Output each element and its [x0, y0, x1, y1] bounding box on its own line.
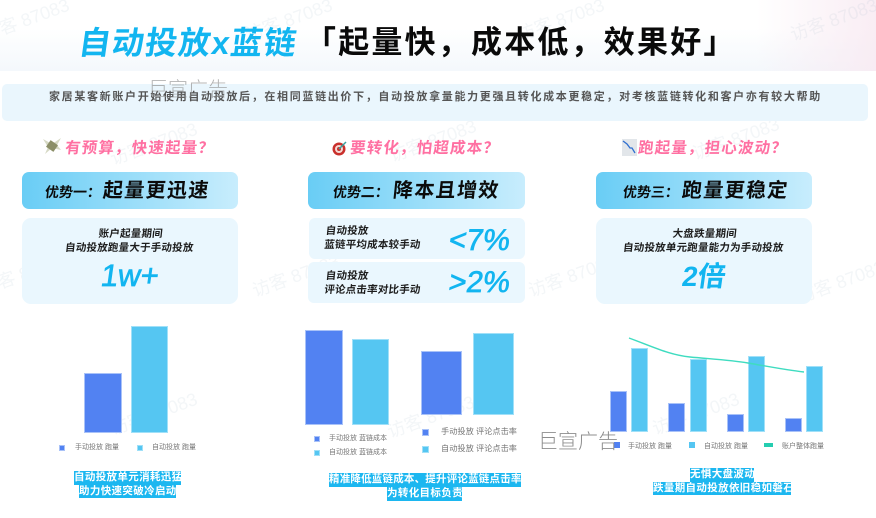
stat card: click rate [308, 262, 525, 303]
caption: 为转化目标负责 [387, 487, 463, 499]
advantage header [596, 172, 812, 209]
caption [653, 468, 794, 495]
stat description: 自动投放跑量大于手动投放 [64, 242, 194, 254]
caption [329, 473, 522, 501]
watermarks: 访客 87083 [250, 251, 342, 301]
advantage header: 降本且增效 [392, 180, 501, 202]
advantage header: 起量更迅速 [102, 180, 211, 202]
caption: 助力快速突破冷启动 [79, 484, 177, 496]
bar chart: click rate: 自动投放 评论点击率 [441, 444, 517, 453]
bar chart [59, 326, 196, 451]
panel: advantage one [22, 138, 238, 498]
watermarks: 访客 87083 [526, 251, 618, 301]
watermarks: 访客 87083 [690, 114, 782, 164]
title: black part: 「起量快，成本低，效果好」 [305, 25, 737, 60]
click rate value: >2% [447, 266, 512, 299]
click rate description: 评论点击率对比手动 [324, 284, 421, 296]
caption: 精准降低蓝链成本、提升评论蓝链点击率 [329, 473, 522, 485]
caption: 无惧大盘波动 [690, 468, 755, 480]
click rate description [324, 270, 421, 296]
watermarks: 访客 87083 [650, 389, 742, 439]
bar chart: 自动投放 跑量 [152, 444, 196, 451]
watermarks: 访客 87083 [385, 392, 477, 442]
header background [0, 0, 876, 71]
bar chart: cost [305, 330, 389, 456]
stat description: 账户起量期间 [98, 228, 163, 240]
icon: target [332, 142, 346, 156]
stat description [64, 228, 194, 254]
stamp: top: 巨宣广告 [148, 79, 228, 101]
icon: money [43, 138, 61, 154]
bar chart: 手动投放 跑量 [75, 444, 119, 451]
advantage header [22, 172, 238, 209]
bar chart: cost: 手动投放 蓝链成本 [329, 435, 387, 442]
combo chart: 账户整体跑量 [782, 441, 824, 450]
stat value: 2倍 [680, 261, 728, 292]
advantage header: 优势一： [44, 184, 102, 200]
title [76, 25, 737, 61]
stat card [596, 218, 812, 304]
panel: advantage two [305, 140, 525, 501]
stat description [622, 228, 784, 254]
stat card: cost [309, 218, 525, 259]
stat description: 大盘跌量期间 [672, 228, 737, 240]
combo chart: 自动投放 跑量 [704, 441, 748, 450]
question: 有预算，快速起量？ [64, 140, 216, 156]
bar chart: click rate [421, 333, 517, 453]
bar chart: click rate: 手动投放 评论点击率 [441, 427, 517, 436]
question: 要转化，怕超成本？ [349, 140, 501, 156]
watermarks: 访客 87083 [387, 116, 479, 166]
advantage header: 优势二： [332, 184, 390, 200]
advantage header: 跑量更稳定 [681, 180, 790, 202]
intro band [2, 84, 868, 121]
cost description: 蓝链平均成本较手动 [324, 239, 421, 251]
stat description: 自动投放单元跑量能力为手动投放 [622, 242, 784, 254]
stat value: 1w+ [99, 258, 161, 293]
watermarks: 访客 87083 [108, 119, 200, 169]
icon: falling chart [622, 139, 637, 156]
stat card [22, 218, 238, 304]
cost description [324, 225, 421, 251]
caption [74, 471, 182, 498]
cost value: <7% [447, 224, 512, 257]
caption: 跌量期自动投放依旧稳如磐石 [653, 482, 794, 494]
combo chart [610, 337, 824, 450]
stamp: bottom: 巨宣广告 [538, 431, 618, 453]
intro text: 家居某客新账户开始使用自动投放后，在相同蓝链出价下，自动投放拿量能力更强且转化成本更稳定，对考核蓝链转化和客户亦有较大帮助 [49, 91, 822, 103]
watermarks: 访客 87083 [108, 389, 200, 439]
title: blue part: 自动投放x蓝链 [76, 25, 300, 61]
click rate description: 自动投放 [325, 270, 369, 282]
advantage header: 优势三： [622, 184, 680, 200]
question: 跑起量，担心波动？ [637, 140, 789, 156]
panel: advantage three [596, 139, 824, 495]
cost description: 自动投放 [325, 225, 369, 237]
caption: 自动投放单元消耗迅猛 [74, 471, 182, 483]
advantage header [308, 172, 525, 209]
combo chart: 手动投放 跑量 [628, 441, 672, 450]
bar chart: cost: 自动投放 蓝链成本 [329, 449, 387, 456]
